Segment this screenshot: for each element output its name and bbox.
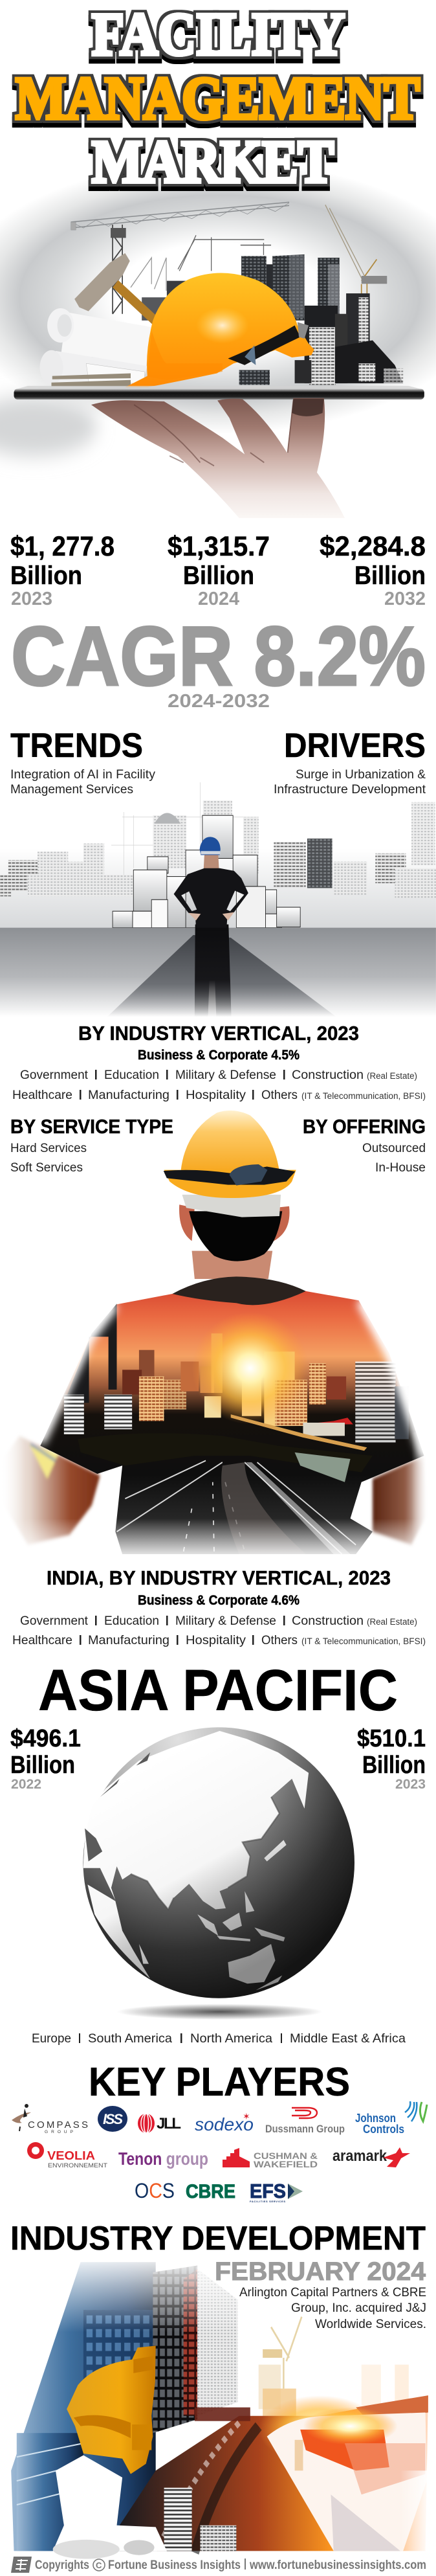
logo: Aramark xyxy=(332,2147,410,2167)
key player logos xyxy=(12,2101,427,2203)
trends heading: TRENDS xyxy=(10,727,143,765)
rail and city lower section xyxy=(120,2395,428,2551)
logo: Compass Group: COMPASS xyxy=(28,2119,88,2130)
double exposure worker illustration xyxy=(0,1111,436,1558)
India industry list xyxy=(12,1614,426,1647)
right fade xyxy=(400,2470,431,2553)
offerings list: In-House xyxy=(375,1160,426,1175)
regions list: South America xyxy=(88,2031,172,2046)
crane cabin xyxy=(362,276,387,284)
hard hat xyxy=(125,273,314,387)
CAGR period: 2024-2032 xyxy=(168,691,270,712)
India industry list: (Real Estate) xyxy=(367,1617,417,1627)
India industry list: Hospitality xyxy=(186,1633,246,1647)
helmet suspension xyxy=(182,1195,281,1217)
tower cranes xyxy=(71,202,376,314)
footer copyright: C xyxy=(96,2560,102,2570)
regions list: Europe xyxy=(32,2031,71,2046)
India industry list: Military & Defense xyxy=(175,1614,276,1628)
soft white edge on right shoulder xyxy=(364,1297,430,1456)
yellow hard hat side xyxy=(67,2346,156,2474)
logo: ISS xyxy=(98,2106,127,2132)
icon: Fortune Business Insights logo xyxy=(11,2557,32,2573)
Asia Pacific value 2023: 2023 xyxy=(395,1777,426,1792)
logo: JLL: JLL xyxy=(157,2115,181,2132)
industry list: Construction xyxy=(292,1068,364,1082)
logo: OCS: OCS xyxy=(135,2179,175,2202)
regions list xyxy=(32,2031,406,2046)
logo: JLL xyxy=(138,2114,181,2133)
footer copyright: Fortune Business Insights xyxy=(108,2559,241,2572)
development date: FEBRUARY 2024 xyxy=(215,2257,426,2286)
market value 2032: Billion xyxy=(354,561,426,590)
drivers text: Infrastructure Development xyxy=(274,782,426,797)
logo: CBRE: CBRE xyxy=(186,2181,235,2202)
trends text: Management Services xyxy=(10,782,133,797)
hair xyxy=(189,1211,282,1261)
blueprint rolls xyxy=(39,308,151,387)
ears xyxy=(179,1204,290,1241)
industry list: Others xyxy=(261,1088,298,1102)
by service type heading: BY SERVICE TYPE xyxy=(10,1115,173,1138)
sun glow xyxy=(192,1312,309,1424)
globe xyxy=(83,1727,354,2020)
industry list: (IT & Telecommunication, BFSI) xyxy=(301,1091,426,1101)
logo: Johnson Controls: Controls xyxy=(363,2123,404,2136)
pale glass tower xyxy=(197,2269,237,2416)
India industry list: Manufacturing xyxy=(88,1633,169,1647)
market value 2024: 2024 xyxy=(198,589,239,609)
elevated highway xyxy=(231,1414,367,1451)
development description: Group, Inc. acquired J&J xyxy=(291,2301,426,2315)
sunlit glow xyxy=(259,2395,381,2464)
India industry list: Construction xyxy=(292,1614,364,1628)
India industry list: Others xyxy=(261,1633,298,1647)
globe ground shadow xyxy=(117,2004,323,2020)
service types list: Soft Services xyxy=(10,1160,83,1175)
top fade xyxy=(11,2254,242,2332)
bar chart blocks xyxy=(113,815,300,928)
development description xyxy=(239,2285,426,2331)
service types list xyxy=(10,1141,87,1175)
Asia Pacific value 2022 xyxy=(10,1725,81,1792)
development description: Worldwide Services. xyxy=(315,2317,426,2331)
leading segment: Business & Corporate 4.5% xyxy=(138,1048,300,1063)
industry list: Government xyxy=(20,1068,89,1082)
market value 2024 xyxy=(168,531,270,609)
industry list: (Real Estate) xyxy=(367,1071,417,1081)
service area xyxy=(295,1452,351,1482)
industry development illustration xyxy=(11,2254,431,2559)
right forearm xyxy=(373,1456,427,1545)
regions list: North America xyxy=(190,2031,272,2046)
misty ground band xyxy=(0,848,436,929)
market value 2032 xyxy=(320,531,426,609)
industry list: Manufacturing xyxy=(88,1088,169,1102)
hammer xyxy=(74,253,158,326)
tablet xyxy=(14,386,424,400)
logo: Dussmann Group xyxy=(265,2108,345,2135)
industry list: Hospitality xyxy=(186,1088,246,1102)
industry list: Military & Defense xyxy=(175,1068,276,1082)
industry list xyxy=(12,1068,426,1102)
market value 2032: $2,284.8 xyxy=(320,531,426,562)
logo: Tenon Group: Tenon group xyxy=(118,2149,208,2169)
soft side fades xyxy=(0,1426,25,1558)
India leading segment: Business & Corporate 4.6% xyxy=(138,1593,300,1608)
continents xyxy=(83,1731,309,1990)
skyline behind helmet xyxy=(142,254,403,385)
Asia Pacific value 2022: 2022 xyxy=(11,1777,41,1792)
logo: Dussmann Group: Dussmann Group xyxy=(265,2123,345,2135)
road lanes xyxy=(117,1461,356,1554)
Asia Pacific value 2023 xyxy=(357,1725,426,1792)
key players heading: KEY PLAYERS xyxy=(89,2060,350,2105)
market value 2024: $1,315.7 xyxy=(168,531,270,562)
India industry list: Government xyxy=(20,1614,89,1628)
lower left vignette shade xyxy=(0,396,97,456)
worker figure xyxy=(174,837,248,1017)
by offering heading: BY OFFERING xyxy=(303,1115,426,1138)
left forearm and paper xyxy=(0,1436,100,1545)
logo: Cushman and Wakefield: WAKEFIELD xyxy=(254,2159,318,2169)
neck xyxy=(192,1251,272,1279)
offerings list xyxy=(362,1141,426,1175)
silhouette: blue building side xyxy=(11,2262,156,2551)
worker facing skyline illustration xyxy=(0,782,436,1017)
curved viaduct xyxy=(267,2413,427,2551)
collar xyxy=(172,1276,306,1305)
headline: industry development: INDUSTRY DEVELOPMENT xyxy=(10,2220,426,2257)
yellow hard hat xyxy=(164,1111,296,1198)
market value 2023: $1, 277.8 xyxy=(10,531,114,562)
market value 2032: 2032 xyxy=(384,589,426,609)
ground xyxy=(0,928,436,1017)
logo: Compass Group xyxy=(12,2104,88,2134)
logo: Aramark: aramark xyxy=(332,2147,387,2165)
globe sphere xyxy=(83,1727,354,1998)
soft white edge on left shoulder xyxy=(36,1300,111,1439)
regions list: Middle East & Africa xyxy=(290,2031,406,2046)
city buildings xyxy=(139,1350,155,1383)
hero illustration: hand holding tablet with helmet and city xyxy=(0,149,436,518)
grey vignette background xyxy=(0,149,436,453)
logo: ISS: ISS xyxy=(103,2111,123,2127)
trees band xyxy=(78,1433,373,1472)
logo: Cushman and Wakefield xyxy=(223,2148,318,2169)
India industry list: Healthcare xyxy=(12,1633,72,1647)
market value 2023: Billion xyxy=(10,561,82,590)
industry list: Healthcare xyxy=(12,1088,72,1102)
distant crane and buildings xyxy=(259,2317,409,2419)
logo: Sodexo: sodexo xyxy=(195,2114,254,2134)
India industry list: (IT & Telecommunication, BFSI) xyxy=(301,1636,426,1646)
logo: Sodexo: ✶ xyxy=(243,2111,250,2121)
industry list: Education xyxy=(104,1068,159,1082)
globe land outline shade xyxy=(131,1797,279,1909)
development description: Arlington Capital Partners & CBRE xyxy=(239,2285,426,2299)
inland sea shadows xyxy=(85,1752,150,1861)
market value 2023: 2023 xyxy=(11,589,52,609)
by industry vertical heading: BY INDUSTRY VERTICAL, 2023 xyxy=(78,1022,359,1045)
Asia Pacific value 2022: $496.1 xyxy=(10,1725,81,1752)
logo: Johnson Controls xyxy=(355,2101,427,2136)
offerings list: Outsourced xyxy=(362,1141,426,1155)
bottom fade of worker xyxy=(0,1519,436,1561)
Asia Pacific value 2023: Billion xyxy=(362,1752,426,1779)
logo: Veolia xyxy=(27,2142,108,2169)
logo: EFS: EFS xyxy=(250,2180,286,2202)
title: MARKET: MARKET xyxy=(92,129,334,196)
Asia Pacific heading: ASIA PACIFIC xyxy=(38,1658,398,1723)
market value 2023 xyxy=(10,531,114,609)
drivers text xyxy=(274,767,426,797)
title: FACILITY: FACILITY xyxy=(92,1,345,68)
India by industry vertical heading: INDIA, BY INDUSTRY VERTICAL, 2023 xyxy=(47,1566,391,1589)
white collar and shoulder xyxy=(53,2456,167,2551)
torso with city xyxy=(40,1291,424,1554)
road xyxy=(107,935,336,1017)
left dark tower xyxy=(64,1304,117,1403)
hand xyxy=(91,398,345,518)
Asia Pacific value 2022: Billion xyxy=(10,1752,75,1779)
logo: Veolia: ENVIRONNEMENT xyxy=(48,2162,108,2169)
Asia Pacific value 2023: $510.1 xyxy=(357,1725,426,1752)
footer copyright: Copyrights xyxy=(35,2559,89,2572)
logo: Veolia: VEOLIA xyxy=(47,2149,95,2162)
logo: EFS: FACILITIES SERVICES xyxy=(250,2200,285,2203)
logo: Johnson Controls: Johnson xyxy=(355,2112,396,2125)
centre dark tower xyxy=(153,2265,197,2433)
market value 2024: Billion xyxy=(183,561,254,590)
logo: Cushman and Wakefield: CUSHMAN & xyxy=(254,2151,318,2161)
trends text: Integration of AI in Facility xyxy=(10,767,155,782)
India industry list: Education xyxy=(104,1614,159,1628)
drivers heading: DRIVERS xyxy=(284,727,426,765)
logo: Compass Group: GROUP xyxy=(45,2130,73,2134)
service types list: Hard Services xyxy=(10,1141,87,1155)
drivers text: Surge in Urbanization & xyxy=(296,767,426,782)
footer copyright xyxy=(11,2557,426,2573)
trends text xyxy=(10,767,155,797)
pale skyline xyxy=(0,782,436,898)
